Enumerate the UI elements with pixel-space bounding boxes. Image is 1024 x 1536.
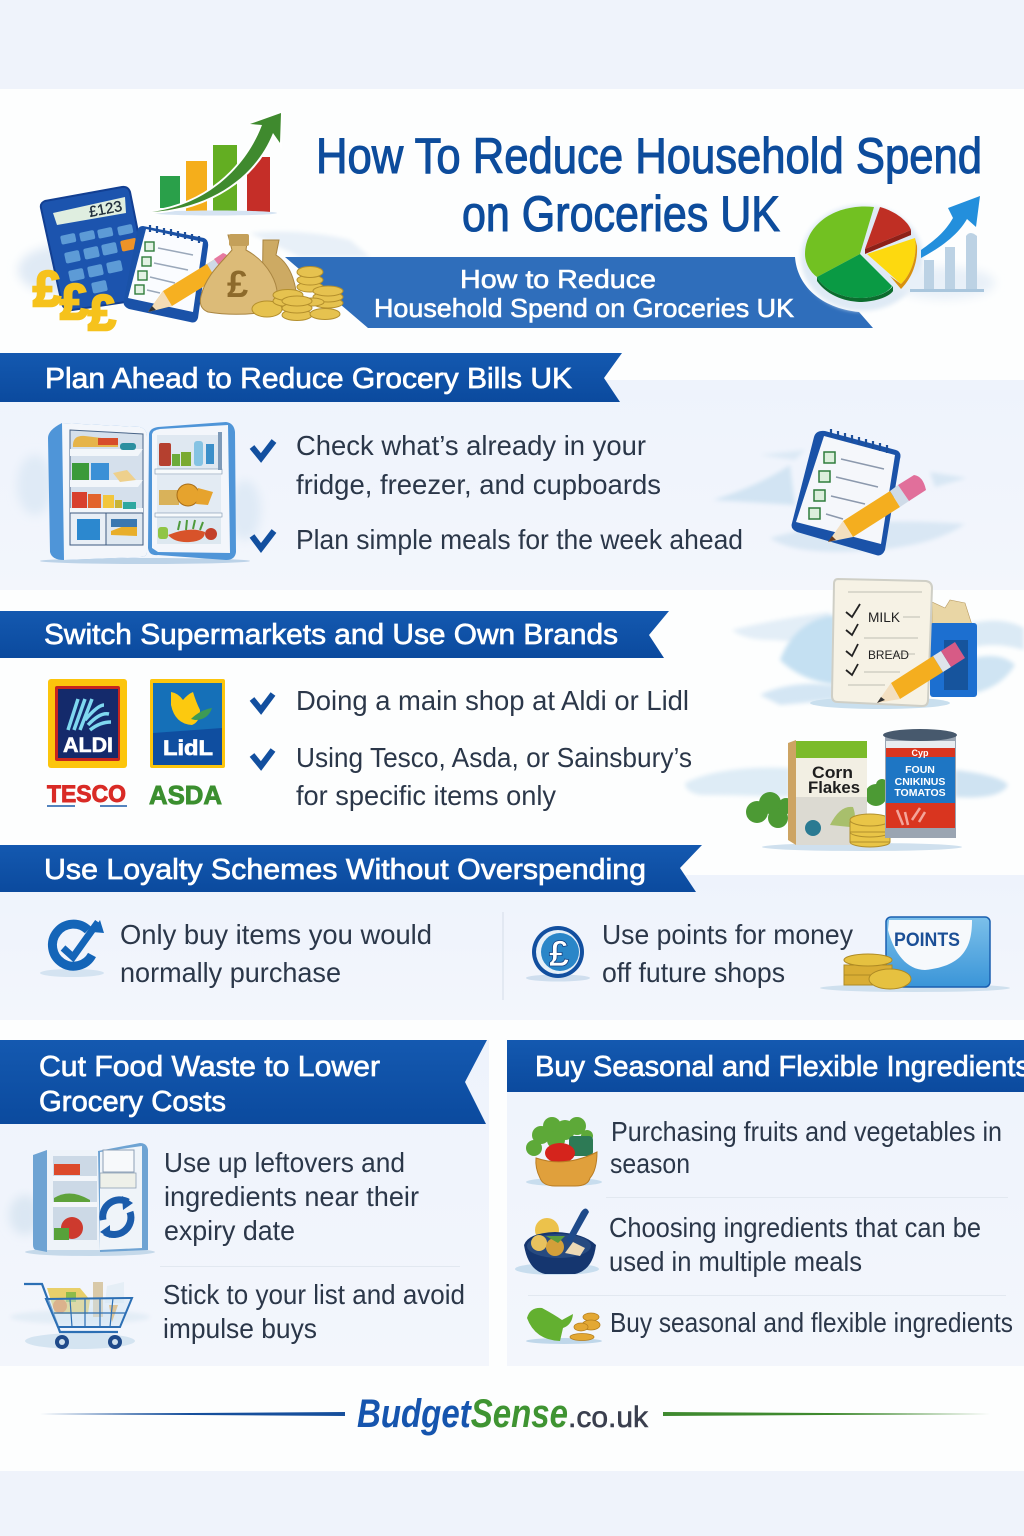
right panel text 2 bbox=[609, 1212, 981, 1277]
tick 1 bbox=[252, 441, 274, 458]
logo: Lidl bbox=[150, 679, 225, 768]
tick 2 bbox=[252, 531, 274, 548]
logo: Asda: ASDA bbox=[149, 780, 222, 810]
icon: pound signs bbox=[33, 261, 116, 341]
icon: money bags and coins bbox=[200, 234, 343, 320]
icon: open fridge bbox=[17, 422, 261, 564]
divider left bbox=[160, 1266, 460, 1267]
icon: check circle bbox=[40, 920, 104, 977]
icon: cornflakes and tinned tomatoes: Cyp bbox=[911, 748, 929, 758]
icon: pie chart with blue arrow bbox=[801, 196, 995, 311]
left panel text 2: Stick to your list and avoid bbox=[163, 1279, 465, 1310]
icon: points card and coins bbox=[820, 917, 1010, 992]
title: on Groceries UK bbox=[462, 186, 780, 242]
left panel text 2 bbox=[163, 1279, 465, 1344]
section 1 checklist bbox=[252, 430, 743, 555]
subtitle banner: How to Reduce bbox=[460, 264, 656, 294]
icon: cooking bowl bbox=[515, 1208, 599, 1275]
right panel text 2: Choosing ingredients that can be bbox=[609, 1212, 981, 1243]
loyalty text left bbox=[120, 919, 432, 988]
icon: cornflakes and tinned tomatoes: TOMATOS bbox=[894, 787, 946, 799]
section 2 checklist: for specific items only bbox=[296, 780, 556, 811]
icon: pound signs: £ bbox=[60, 274, 88, 330]
icon: shopping list and pencil bbox=[732, 579, 1024, 709]
logo: Tesco: TESCO bbox=[47, 781, 126, 808]
left panel text 1: ingredients near their bbox=[164, 1181, 419, 1212]
icon: shopping list and pencil: MILK bbox=[868, 609, 901, 625]
loyalty text right: Use points for money bbox=[602, 919, 853, 950]
section 5 banner: buy seasonal: Buy Seasonal and Flexible Ingredients bbox=[535, 1051, 1024, 1083]
section 2 checklist: Using Tesco, Asda, or Sainsbury’s bbox=[296, 742, 692, 773]
logo: Lidl: LidL bbox=[163, 737, 213, 760]
left panel text 1: Use up leftovers and bbox=[164, 1147, 405, 1178]
divider right 1 bbox=[606, 1197, 1008, 1198]
section 2 checklist: Doing a main shop at Aldi or Lidl bbox=[296, 685, 689, 716]
title bbox=[316, 128, 982, 242]
section 4 banner: cut food waste: Grocery Costs bbox=[39, 1086, 226, 1118]
section 3 banner: Use Loyalty Schemes Without Overspending bbox=[44, 854, 646, 886]
icon: cornflakes and tinned tomatoes: CNIKINUS bbox=[895, 776, 945, 788]
section 2 banner: Switch Supermarkets and Use Own Brands bbox=[44, 619, 618, 651]
footer logo bbox=[40, 1392, 990, 1436]
section 1 checklist: Plan simple meals for the week ahead bbox=[296, 524, 743, 555]
section 1 banner: Plan Ahead to Reduce Grocery Bills UK bbox=[45, 363, 573, 395]
icon: checklist with pencil bbox=[124, 225, 231, 322]
tick 3 bbox=[252, 694, 273, 710]
icon: pound coin: £ bbox=[549, 933, 569, 974]
left panel text 1 bbox=[164, 1147, 419, 1246]
icon: calculator: £123 bbox=[88, 198, 124, 221]
icon: fridge with recycling arrows bbox=[9, 1143, 155, 1256]
footer logo: BudgetSense bbox=[357, 1392, 568, 1436]
section 2 banner bbox=[0, 611, 669, 658]
section 1 banner bbox=[0, 353, 622, 402]
right panel text 1 bbox=[610, 1116, 1002, 1179]
loyalty text right bbox=[602, 919, 853, 988]
subtitle banner: Household Spend on Groceries UK bbox=[374, 293, 795, 323]
icon: pound signs: £ bbox=[33, 261, 61, 317]
icon: shopping cart bbox=[10, 1282, 150, 1349]
icon: cornflakes and tinned tomatoes: Corn bbox=[812, 764, 853, 782]
icon: cornflakes and tinned tomatoes: FOUN bbox=[905, 764, 935, 776]
loyalty text left: normally purchase bbox=[120, 957, 341, 988]
tick 4 bbox=[252, 750, 273, 766]
right panel text 2: used in multiple meals bbox=[609, 1246, 862, 1277]
footer logo: .co.uk bbox=[568, 1401, 649, 1434]
section 1 checklist: Check what’s already in your bbox=[296, 430, 646, 461]
divider right 2 bbox=[528, 1295, 1006, 1296]
icon: pound coin bbox=[526, 926, 590, 982]
section 3 banner bbox=[0, 845, 702, 892]
icon: money bags and coins: £ bbox=[227, 264, 248, 306]
right panel text 1: season bbox=[610, 1148, 690, 1179]
logo: Aldi bbox=[48, 679, 127, 768]
icon: vegetable basket bbox=[526, 1117, 602, 1186]
section 1 checklist: fridge, freezer, and cupboards bbox=[296, 469, 661, 500]
section 2 checklist bbox=[252, 685, 692, 811]
loyalty text right: off future shops bbox=[602, 957, 785, 988]
subtitle banner bbox=[250, 232, 873, 328]
divider bbox=[502, 912, 504, 1000]
left panel text 1: expiry date bbox=[164, 1215, 295, 1246]
icon: cornflakes and tinned tomatoes bbox=[685, 729, 1008, 851]
icon: pound signs: £ bbox=[88, 285, 116, 341]
left panel text 2: impulse buys bbox=[163, 1313, 317, 1344]
section 4 banner: cut food waste: Cut Food Waste to Lower bbox=[39, 1051, 380, 1083]
icon: bar chart with green arrow bbox=[152, 113, 281, 216]
loyalty text left: Only buy items you would bbox=[120, 919, 432, 950]
icon: shopping list and pencil: BREAD bbox=[868, 648, 909, 662]
section 5 banner: buy seasonal bbox=[507, 1040, 1024, 1092]
icon: chilli and ginger bbox=[526, 1308, 602, 1344]
logo: Aldi: ALDI bbox=[63, 734, 113, 757]
icon: calculator bbox=[18, 187, 150, 310]
icon: notepad checklist and pencil bbox=[713, 429, 967, 555]
icon: points card and coins: POINTS bbox=[894, 930, 960, 951]
section 4 banner: cut food waste bbox=[0, 1040, 487, 1124]
icon: cornflakes and tinned tomatoes: Flakes bbox=[808, 779, 860, 797]
